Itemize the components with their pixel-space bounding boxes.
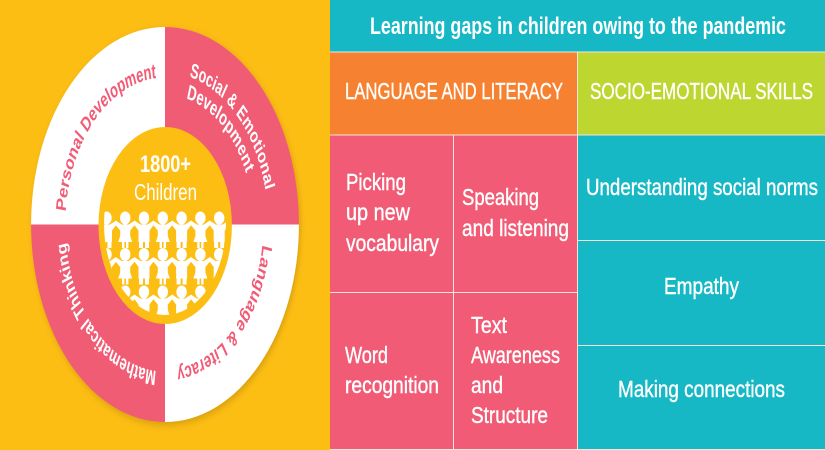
label: language and literacy: Language & Literacy [178, 246, 272, 380]
cell: picking up new vocabulary: Picking [346, 169, 406, 195]
right table panel [330, 0, 825, 450]
centre circle [98, 127, 232, 324]
left panel background [0, 0, 330, 450]
donut ring [31, 27, 299, 422]
cell: speaking and listening [454, 136, 577, 292]
heading: language and literacy [330, 52, 577, 134]
heading: language and literacy: LANGUAGE AND LITERACY [345, 78, 563, 104]
cell: text awareness and structure: Structure [471, 402, 548, 428]
cell: understanding social norms [578, 136, 825, 240]
donut chart: learning domains [30, 27, 302, 428]
cell: picking up new vocabulary: up new [346, 199, 410, 225]
cell: text awareness and structure: Text [471, 312, 508, 338]
cell: making connections: Making connections [618, 376, 785, 402]
cell: empathy: Empathy [664, 273, 739, 299]
stat: 1800+: 1800+ [140, 151, 191, 178]
label: personal development: Personal Development [56, 64, 156, 210]
cell: making connections [578, 346, 825, 449]
cell: speaking and listening: and listening [462, 215, 569, 241]
heading: socio-emotional skills [578, 52, 825, 134]
label: mathematical thinking: Mathematical Thinking [58, 244, 156, 386]
cell: empathy [578, 241, 825, 345]
icon: chain of children [104, 212, 226, 315]
label: social and emotional: Social & Emotional [190, 64, 276, 190]
cell: word recognition [330, 293, 453, 449]
title bar [330, 0, 825, 52]
cell: picking up new vocabulary [330, 136, 453, 292]
cell: text awareness and structure: Awareness [471, 342, 560, 368]
cell: word recognition: recognition [345, 372, 439, 398]
label: development: Development [187, 84, 254, 174]
cell: text awareness and structure [454, 293, 577, 449]
cell: picking up new vocabulary: vocabulary [346, 230, 439, 256]
cell: text awareness and structure: and [471, 372, 503, 398]
ring labels [56, 64, 276, 386]
stat label: children: Children [134, 179, 197, 205]
cell: speaking and listening: Speaking [462, 184, 539, 210]
cell: word recognition: Word [345, 342, 388, 368]
